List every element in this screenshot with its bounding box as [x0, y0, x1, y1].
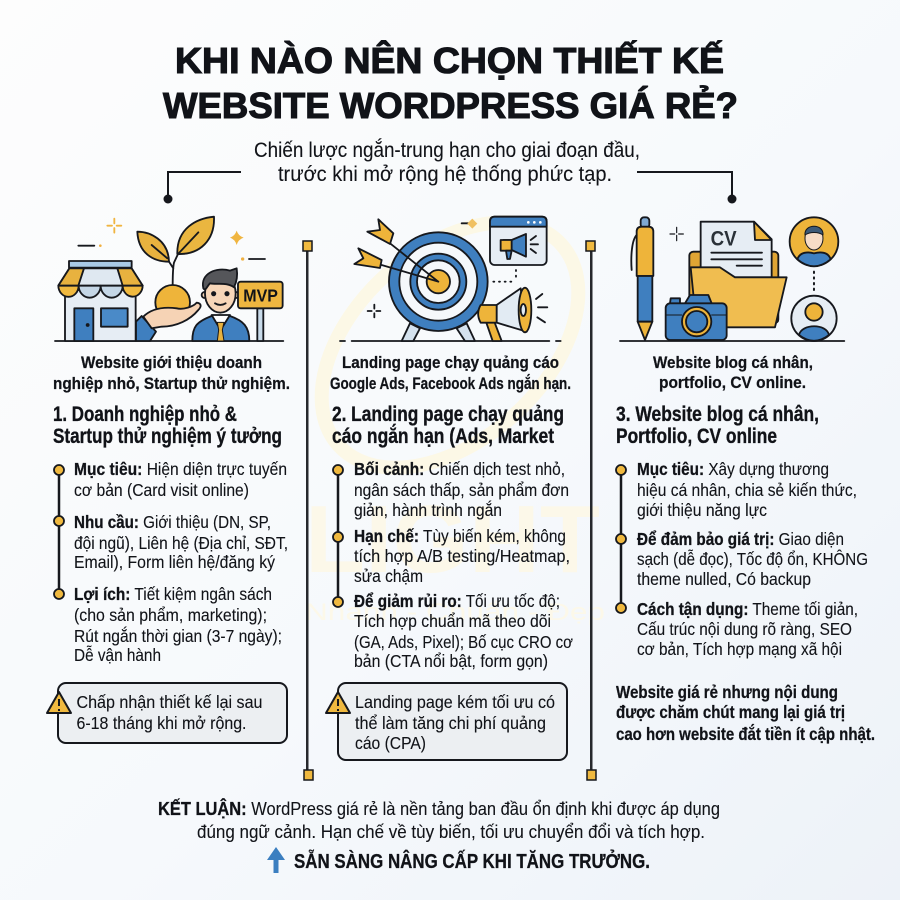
column 1 caption — [53, 354, 290, 393]
column 2 heading: 2. Landing page chạy quảng — [332, 403, 564, 426]
watermark: LIGHT — [305, 486, 600, 593]
column 3 list: sạch (dễ đọc), Tốc độ ổn, KHÔNG — [637, 548, 868, 569]
column 1 warning callout — [47, 683, 287, 743]
column 1 list: Rút ngắn thời gian (3-7 ngày); — [74, 625, 282, 646]
column 1 list — [74, 459, 288, 665]
column 3 caption — [653, 354, 813, 392]
column 2 caption: Google Ads, Facebook Ads ngắn hạn. — [330, 374, 571, 393]
column 3 timeline — [616, 465, 626, 613]
column 1 heading: 1. Doanh nghiệp nhỏ & — [53, 403, 237, 426]
column 2 caption — [330, 354, 571, 393]
connector: right — [637, 172, 736, 204]
subtitle: trước khi mở rộng hệ thống phức tạp. — [278, 162, 612, 186]
column 3 list: Để đảm bảo giá trị: Giao diện — [637, 529, 844, 549]
column 1 list: Nhu cầu: Giới thiệu (DN, SP, — [74, 512, 271, 532]
column 1 list: (cho sản phẩm, marketing); — [74, 605, 267, 625]
column 3 list — [637, 459, 868, 659]
column 2 list: Hạn chế: Tùy biến kém, không — [354, 526, 566, 546]
column 3 list: giới thiệu năng lực — [637, 500, 767, 520]
illustration: pen, CV folder, camera, profiles — [620, 217, 844, 341]
column 3 list: cơ bản, Tích hợp mạng xã hội — [637, 639, 842, 659]
icon: upward arrow — [267, 847, 285, 873]
connector: left — [164, 172, 241, 204]
column 2 heading: cáo ngắn hạn (Ads, Market — [332, 424, 554, 448]
column 2 list: Để giảm rủi ro: Tối ưu tốc độ; — [354, 591, 560, 611]
column 1 timeline — [54, 465, 64, 599]
column 1 list: Dễ vận hành — [74, 644, 161, 665]
column 2 list: giản, hành trình ngắn — [354, 499, 502, 520]
divider: right — [586, 241, 596, 780]
column 1 list: cơ bản (Card visit online) — [74, 480, 249, 500]
column 2 warning callout: thể làm tăng chi phí quảng — [355, 713, 546, 733]
subtitle: Chiến lược ngắn-trung hạn cho giai đoạn đầu, — [254, 137, 640, 162]
column 3 list: Cấu trúc nội dung rõ ràng, SEO — [637, 619, 852, 639]
column 2 list: sửa chậm — [354, 566, 423, 586]
column 1 caption: Website giới thiệu doanh — [81, 354, 262, 372]
column 3 list: theme nulled, Có backup — [637, 569, 811, 589]
column 2 list: Bối cảnh: Chiến dịch test nhỏ, — [354, 459, 565, 479]
column 2 list: tích hợp A/B testing/Heatmap, — [354, 546, 570, 566]
conclusion: đúng ngữ cảnh. Hạn chế về tùy biến, tối ưu chuyển đổi và tích hợp. — [197, 822, 705, 842]
column 1 list: Lợi ích: Tiết kiệm ngân sách — [74, 584, 272, 604]
column 3 heading: Portfolio, CV online — [616, 425, 777, 448]
column 3 list: hiệu cá nhân, chia sẻ kiến thức, — [637, 480, 857, 500]
column 2 list: Tích hợp chuẩn mã theo dõi — [354, 611, 551, 631]
column 3 caption: portfolio, CV online. — [659, 374, 806, 392]
column 2 warning callout: Landing page kém tối ưu có — [355, 692, 555, 712]
illustration: target and megaphone — [340, 217, 561, 341]
column 3 list: Mục tiêu: Xây dựng thương — [637, 459, 829, 479]
title — [163, 39, 738, 126]
subtitle — [254, 137, 640, 186]
column 2 timeline — [333, 465, 343, 607]
column 2 heading — [332, 403, 564, 448]
watermark — [275, 174, 625, 626]
column 1 list: Email), Form liên hệ/đăng ký — [74, 552, 275, 572]
column 1 heading: Startup thử nghiệm ý tưởng — [53, 425, 282, 448]
column 2 list — [354, 459, 573, 671]
column 2 list: bản (CTA nổi bật, form gọn) — [354, 651, 548, 671]
illustration: shop, plant, founder: MVP — [243, 286, 278, 306]
column 3 caption: Website blog cá nhân, — [653, 354, 813, 372]
column 2 list: (GA, Ads, Pixel); Bố cục CRO cơ — [354, 632, 573, 652]
column 1 list: Mục tiêu: Hiện diện trực tuyến — [74, 459, 287, 479]
column 1 list: đội ngũ), Liên hệ (Địa chỉ, SĐT, — [74, 533, 288, 553]
column 3 list: Cách tận dụng: Theme tối giản, — [637, 599, 858, 619]
divider: left — [303, 241, 313, 780]
column 3 note: được chăm chút mang lại giá trị — [616, 702, 845, 722]
column 3 heading: 3. Website blog cá nhân, — [616, 403, 819, 426]
conclusion: KẾT LUẬN: WordPress giá rẻ là nền tảng ban đầu ổn định khi được áp dụng — [158, 798, 720, 819]
column 2 warning callout — [326, 683, 567, 760]
call to action: SẴN SÀNG NÂNG CẤP KHI TĂNG TRƯỞNG. — [294, 849, 650, 873]
illustration: shop, plant, founder — [55, 217, 283, 341]
watermark: Nhanh - Chuẩn - Đẹp — [305, 599, 605, 626]
title: WEBSITE WORDPRESS GIÁ RẺ? — [163, 85, 738, 126]
column 1 caption: nghiệp nhỏ, Startup thử nghiệm. — [53, 375, 290, 393]
title: KHI NÀO NÊN CHỌN THIẾT KẾ — [175, 39, 724, 81]
column 1 warning callout: 6-18 tháng khi mở rộng. — [76, 713, 246, 733]
column 2 list: ngân sách thấp, sản phẩm đơn — [354, 480, 569, 500]
column 3 note: Website giá rẻ nhưng nội dung — [616, 682, 838, 702]
column 1 heading — [53, 403, 282, 448]
column 2 caption: Landing page chạy quảng cáo — [342, 354, 559, 372]
column 3 note — [616, 682, 875, 744]
column 1 warning callout: Chấp nhận thiết kế lại sau — [76, 692, 262, 712]
column 3 heading — [616, 403, 819, 448]
illustration: pen, CV folder, camera, profiles: CV — [711, 227, 737, 251]
column 2 warning callout: cáo (CPA) — [355, 733, 426, 753]
conclusion — [158, 798, 720, 842]
